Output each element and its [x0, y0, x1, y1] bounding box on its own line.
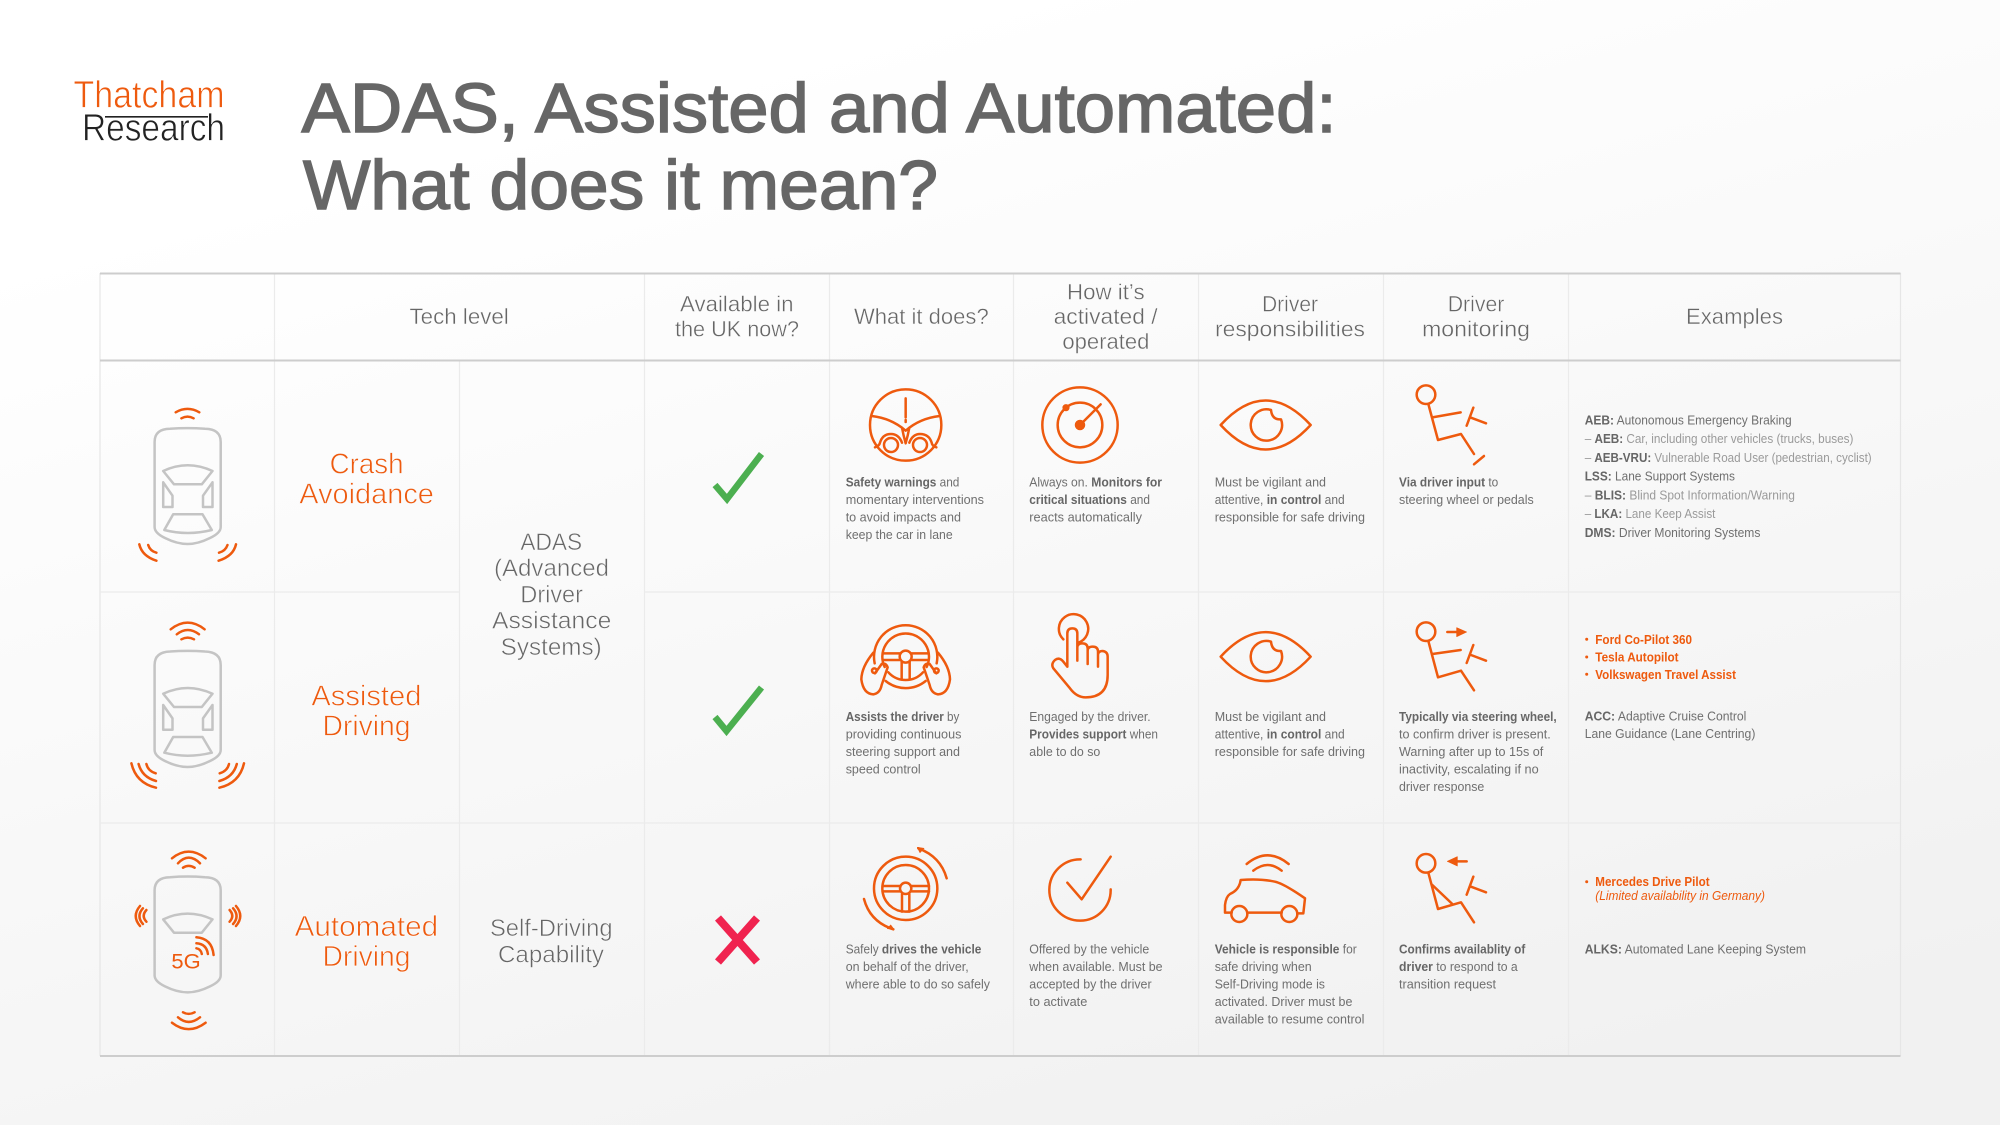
row: Assisted Driving	[131, 614, 1755, 794]
how it's activated	[1028, 857, 1163, 1009]
text: driver response	[1399, 779, 1484, 794]
text: critical situations and	[1029, 492, 1150, 507]
tech group label: ADAS: ADAS	[520, 529, 582, 556]
icon: car with medium sensor waves	[131, 623, 244, 788]
driver responsibilities	[1215, 632, 1365, 759]
text: Typically via steering wheel,	[1399, 709, 1557, 724]
text: momentary interventions	[846, 492, 984, 507]
level: Crash Avoidance	[299, 448, 434, 510]
text	[1399, 941, 1526, 991]
header: Driver monitoring: Driver	[1448, 292, 1504, 317]
text: transition request	[1399, 976, 1496, 991]
text: Self-Driving mode is	[1215, 976, 1325, 991]
driver monitoring	[1399, 622, 1557, 794]
text	[1028, 941, 1163, 1009]
logo: Thatcham Research	[74, 75, 225, 150]
icon: circled tick	[1049, 857, 1111, 921]
text: providing continuous	[846, 726, 962, 742]
tech group label: ADAS: Systems)	[501, 634, 602, 661]
tech group label: ADAS: (Advanced	[494, 555, 609, 582]
text: Assists the driver by	[846, 709, 960, 724]
text: activated. Driver must be	[1215, 994, 1352, 1009]
text: speed control	[846, 762, 921, 776]
examples: – BLIS: Blind Spot Information/Warning	[1585, 487, 1795, 502]
tech group label: Self-Driving Capability: Capability	[498, 942, 604, 969]
examples: DMS: Driver Monitoring Systems	[1585, 525, 1761, 540]
tech group label: Self-Driving Capability	[490, 915, 612, 969]
what it does	[846, 389, 984, 542]
examples: – AEB-VRU: Vulnerable Road User (pedestrian, cyclist)	[1585, 450, 1872, 465]
icon: eye	[1221, 400, 1311, 449]
text: where able to do so safely	[845, 976, 990, 991]
header: Available in the UK now?: Available in	[680, 292, 794, 317]
examples	[1585, 632, 1755, 741]
text: inactivity, escalating if no	[1399, 762, 1539, 776]
text: able to do so	[1029, 744, 1100, 759]
text: driver to respond to a	[1399, 959, 1518, 974]
examples: ACC: Adaptive Cruise Control	[1585, 709, 1746, 724]
text: attentive, in control and	[1215, 492, 1345, 507]
header: Driver responsibilities	[1215, 292, 1365, 342]
examples: Mercedes Drive Pilot	[1595, 874, 1710, 889]
header: Tech level: Tech level	[410, 304, 509, 329]
tech group label: ADAS	[492, 529, 611, 661]
text	[845, 941, 990, 991]
level: Automated Driving: Automated	[295, 911, 438, 943]
header: Available in the UK now?	[675, 292, 799, 342]
text: to activate	[1029, 994, 1087, 1009]
text	[1399, 475, 1534, 507]
text: reacts automatically	[1029, 510, 1142, 525]
header: How it's activated / operated: How it’s	[1067, 279, 1145, 304]
logo: Thatcham Research: Research	[82, 108, 225, 150]
text: responsible for safe driving	[1215, 510, 1365, 525]
header: What it does?: What it does?	[854, 304, 989, 329]
icon: seated driver with arrow right	[1417, 622, 1486, 690]
header: Driver responsibilities: Driver	[1262, 292, 1318, 317]
level: Automated Driving	[295, 911, 438, 973]
header: Driver monitoring	[1422, 292, 1530, 342]
text: to avoid impacts and	[846, 510, 961, 525]
level: Assisted Driving: Driving	[322, 711, 410, 743]
icon: green check	[715, 688, 762, 731]
driver responsibilities	[1215, 400, 1365, 525]
text: responsible for safe driving	[1215, 744, 1365, 759]
text: Safely drives the vehicle	[846, 941, 981, 956]
driver responsibilities	[1215, 855, 1365, 1026]
text: when available. Must be	[1028, 959, 1163, 974]
text: steering wheel or pedals	[1399, 492, 1534, 507]
icon: finger press	[1052, 614, 1108, 697]
examples: – AEB: Car, including other vehicles (trucks, buses)	[1585, 431, 1853, 446]
header: Available in the UK now?: the UK now?	[675, 317, 799, 342]
title: What does it mean?	[303, 146, 938, 224]
text: attentive, in control and	[1215, 726, 1345, 742]
level: Assisted Driving: Assisted	[311, 681, 421, 713]
how it's activated	[1029, 387, 1162, 525]
icon: rotating steering wheel	[864, 847, 947, 929]
icon: connected car with 5G: 5G	[171, 950, 201, 973]
header: How it's activated / operated	[1054, 279, 1159, 354]
text: steering support and	[846, 744, 960, 759]
header: Driver responsibilities: responsibilities	[1215, 317, 1365, 342]
level: Assisted Driving	[311, 681, 421, 743]
header: How it's activated / operated: operated	[1062, 329, 1149, 354]
text	[846, 709, 962, 776]
text	[1029, 709, 1158, 759]
what it does	[846, 625, 962, 776]
text: Warning after up to 15s of	[1399, 744, 1544, 759]
header: Driver monitoring: monitoring	[1422, 317, 1530, 342]
icon: eye	[1221, 632, 1311, 681]
tech group label: ADAS: Assistance	[492, 608, 611, 635]
examples	[1585, 412, 1872, 540]
table header row	[410, 279, 1783, 354]
text	[1029, 475, 1162, 525]
examples: Ford Co-Pilot 360	[1595, 632, 1692, 647]
examples	[1585, 874, 1806, 956]
how it's activated	[1029, 614, 1158, 759]
level: Automated Driving: Driving	[322, 941, 410, 973]
examples: AEB: Autonomous Emergency Braking	[1585, 412, 1792, 427]
examples: – LKA: Lane Keep Assist	[1585, 506, 1716, 521]
icon: hands on steering wheel	[861, 625, 950, 694]
icon: connected car side view	[1225, 855, 1305, 922]
title: ADAS, Assisted and Automated:	[302, 69, 1336, 147]
text: Must be vigilant and	[1215, 709, 1326, 724]
text: Provides support when	[1029, 726, 1158, 742]
text	[846, 475, 984, 542]
text: to confirm driver is present.	[1399, 726, 1551, 742]
text: available to resume control	[1215, 1011, 1365, 1026]
examples: ALKS: Automated Lane Keeping System	[1585, 941, 1806, 956]
examples: LSS: Lane Support Systems	[1585, 469, 1735, 484]
examples: (Limited availability in Germany)	[1595, 888, 1765, 903]
icon: seated driver with arrow left	[1417, 854, 1486, 922]
text	[1215, 709, 1365, 759]
icon: red cross	[718, 918, 757, 962]
header: How it's activated / operated: activated /	[1054, 304, 1159, 329]
text	[1215, 941, 1365, 1026]
text: accepted by the driver	[1029, 976, 1152, 991]
level: Crash Avoidance: Crash	[330, 448, 404, 480]
text: Always on. Monitors for	[1029, 475, 1162, 490]
examples: Tesla Autopilot	[1595, 650, 1679, 665]
icon: seated driver with pedal	[1417, 385, 1486, 464]
header: Examples: Examples	[1686, 304, 1783, 329]
text: Via driver input to	[1399, 475, 1498, 490]
text: Safety warnings and	[846, 475, 959, 490]
text: Confirms availablity of	[1399, 941, 1526, 956]
icon: radar dial	[1042, 387, 1118, 463]
tech group label: Self-Driving Capability: Self-Driving	[490, 915, 612, 942]
row: Crash Avoidance	[139, 385, 1872, 561]
text	[1399, 709, 1557, 794]
level: Crash Avoidance: Avoidance	[299, 478, 434, 510]
driver monitoring	[1399, 854, 1526, 991]
text: Must be vigilant and	[1215, 475, 1326, 490]
examples: Volkswagen Travel Assist	[1595, 667, 1737, 682]
icon: car with short sensor waves	[139, 409, 236, 561]
text: safe driving when	[1215, 959, 1312, 974]
text: keep the car in lane	[846, 527, 953, 542]
text: on behalf of the driver,	[846, 959, 969, 974]
examples: Lane Guidance (Lane Centring)	[1585, 726, 1755, 741]
row: Automated Driving	[136, 847, 1806, 1029]
text: Offered by the vehicle	[1029, 941, 1149, 956]
what it does	[845, 847, 990, 991]
logo: Thatcham Research: Thatcham	[74, 75, 224, 117]
text	[1215, 475, 1365, 525]
tech group label: ADAS: Driver	[520, 581, 583, 608]
icon: connected car with 5G	[136, 852, 240, 1029]
icon: green check	[715, 454, 762, 499]
text: Vehicle is responsible for	[1215, 941, 1357, 956]
driver monitoring	[1399, 385, 1534, 507]
title	[302, 69, 1336, 224]
text: Engaged by the driver.	[1029, 709, 1151, 724]
icon: car warning	[870, 389, 941, 461]
